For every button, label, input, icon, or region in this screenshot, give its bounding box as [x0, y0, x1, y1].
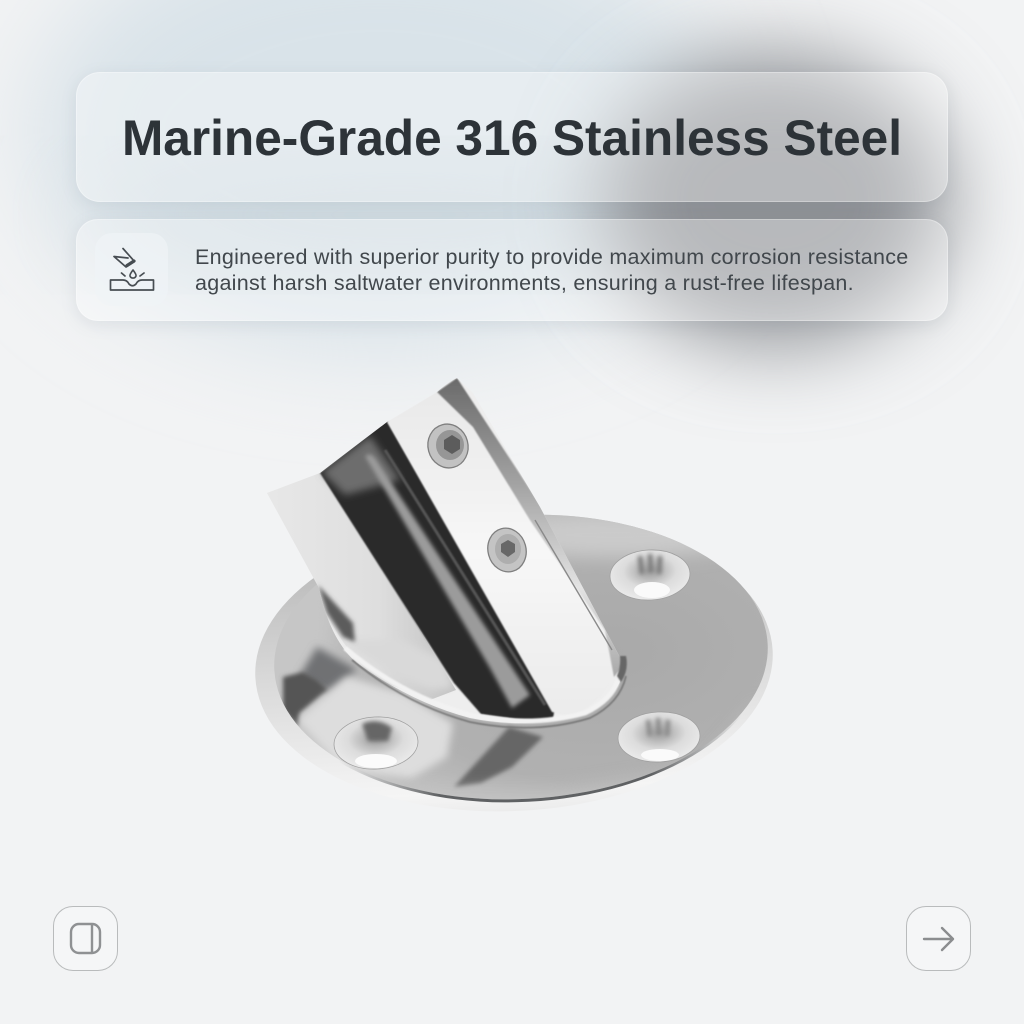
grey reflection stripe [365, 454, 530, 708]
left satin face [286, 474, 456, 699]
fitting angled tube [267, 378, 620, 723]
text line 2: against harsh saltwater environments, ensuring a rust-free lifespan. [195, 271, 854, 295]
socket screw: upper [423, 420, 473, 472]
socket screw: lower [483, 524, 531, 576]
panel: description card [76, 219, 948, 321]
description text [195, 245, 908, 295]
product photo: stainless steel rail base fitting [255, 378, 773, 802]
fitting base disc [255, 514, 773, 802]
panel: title card [76, 72, 948, 202]
bright flat face [386, 421, 556, 714]
mounting hole: top right [609, 548, 691, 602]
icon: layered square [70, 922, 102, 954]
icon: molten metal pouring on a surface [110, 248, 154, 291]
mounting hole: bottom left [333, 715, 419, 771]
right narrow face [437, 378, 625, 677]
icon: arrow right [922, 926, 954, 952]
mounting hole: bottom right [617, 710, 701, 764]
text line 1: Engineered with superior purity to provide maximum corrosion resistance [195, 245, 908, 269]
button: panel toggle icon [53, 906, 118, 971]
dark polished band [320, 420, 555, 724]
fillet gloss [415, 652, 452, 690]
button: next arrow [906, 906, 971, 971]
title: Marine-Grade 316 Stainless Steel [122, 110, 902, 166]
tube foot highlight [345, 648, 627, 728]
